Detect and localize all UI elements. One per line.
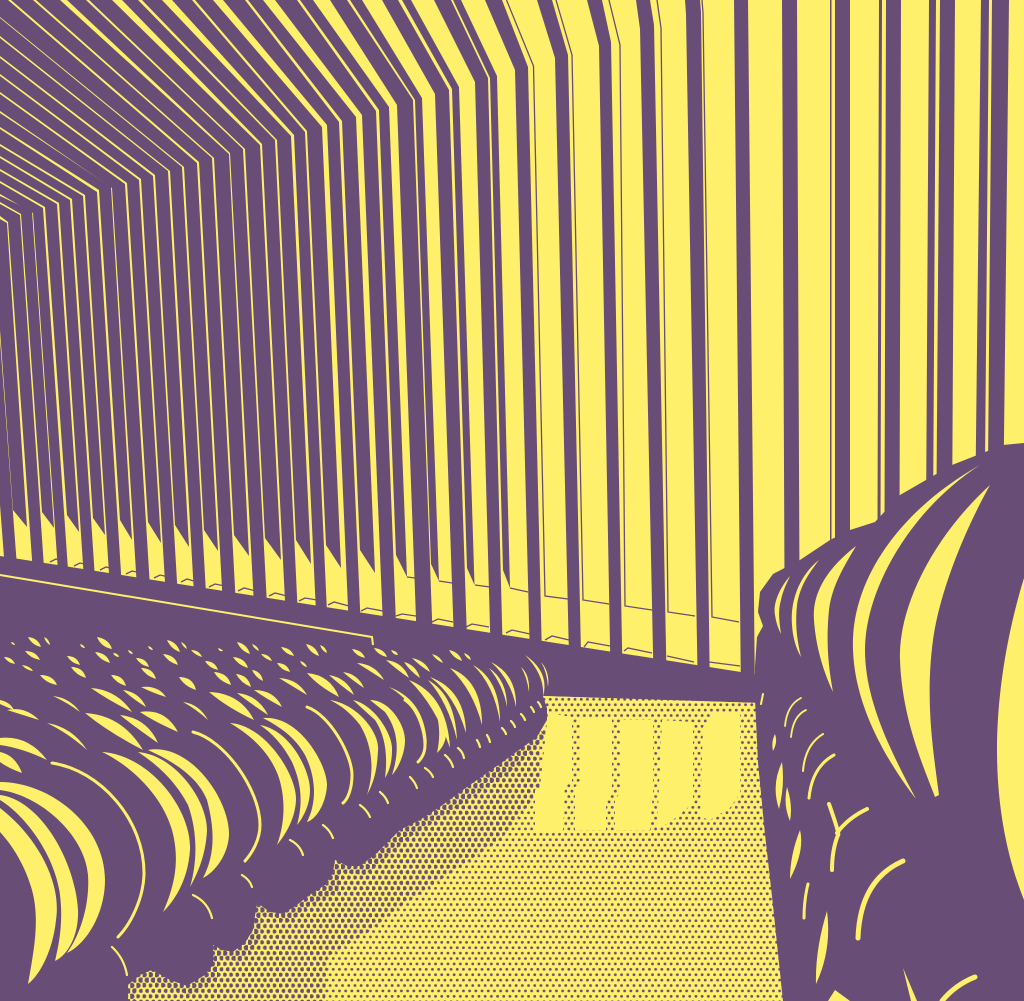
left rows of bananas: thin arcs and ticks: [52, 700, 541, 975]
skirting chevrons at the foot of the wall: [50, 559, 740, 666]
left rows of bananas: mid crescents: [0, 655, 548, 773]
right foreground banana bunch silhouette: [755, 443, 1024, 1001]
yellow highlight line: [0, 575, 373, 645]
left rows of bananas: large front crescents: [0, 700, 446, 984]
wall shadow panels: [0, 0, 989, 700]
right bunch bananas: [772, 465, 1024, 1001]
right bunch small arcs: [761, 694, 975, 1001]
floor with halftone dots: [120, 690, 790, 1001]
dark edge of floor: [120, 730, 548, 1001]
ground base: [0, 556, 1024, 1001]
wall posts: [0, 0, 1009, 700]
lighter floor zone: [325, 690, 790, 1001]
thin outlines on wall panels: [407, 0, 739, 622]
left rows of bananas: far leaf highlights: [4, 637, 471, 690]
reflections of the wall on floor: [535, 713, 740, 833]
